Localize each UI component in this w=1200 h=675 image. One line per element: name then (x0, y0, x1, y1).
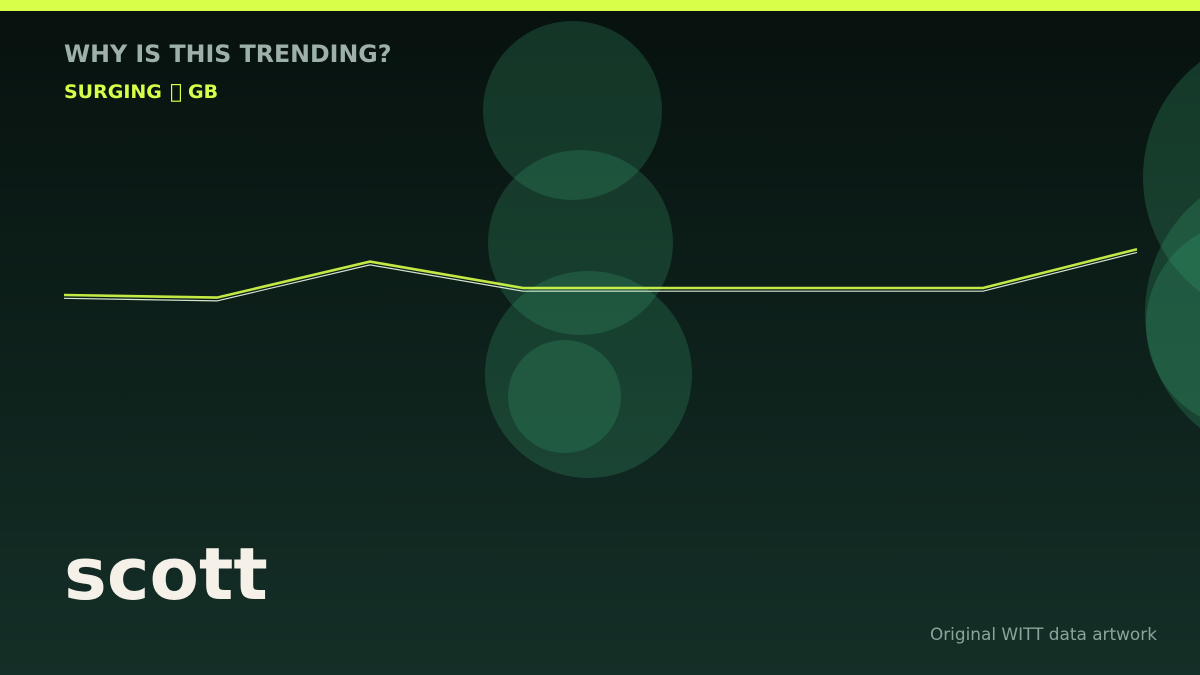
bubble cluster: center (483, 21, 692, 478)
top accent bar (0, 0, 1200, 11)
title: WHY IS THIS TRENDING? (64, 40, 391, 68)
status subtitle: SURGING (64, 81, 162, 103)
footer credit: Original WITT data artwork (930, 624, 1157, 644)
trend line chart (64, 249, 1137, 301)
status subtitle (64, 81, 218, 103)
status subtitle: GB (188, 81, 218, 103)
topic name: scott (64, 532, 268, 616)
bubble cluster: right edge (1143, 32, 1200, 461)
